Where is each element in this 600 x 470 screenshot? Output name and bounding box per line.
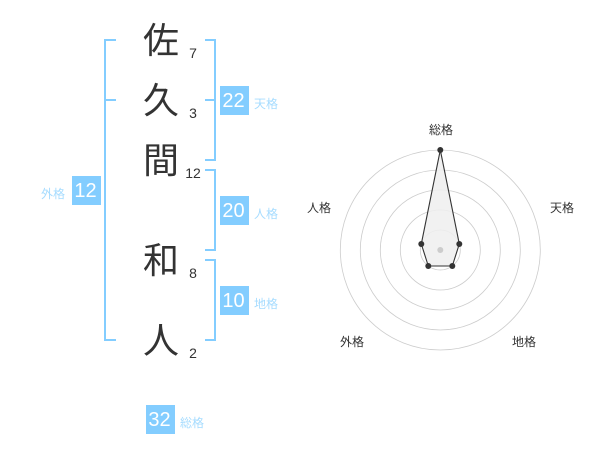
score: 地格 10: 10 (222, 290, 245, 312)
stroke count: 3: 3 (189, 105, 197, 121)
label: 人格: 人格 (254, 207, 278, 221)
label: 地格: 地格 (254, 297, 278, 311)
radar label: 天格: 天格 (550, 201, 574, 215)
label: 外格: 外格 (41, 187, 65, 201)
stroke count: 12: 12 (185, 165, 201, 181)
score: 外格 12 (72, 176, 101, 205)
score: 天格 22 (220, 86, 249, 115)
score: 人格 20 (220, 196, 249, 225)
score: 人格 20: 20 (222, 200, 245, 222)
score: 総格 32: 32 (148, 409, 171, 431)
label: 総格: 総格 (180, 416, 204, 430)
stroke count: 8: 8 (189, 265, 197, 281)
kanji: 人: 人 (143, 320, 179, 361)
kanji: 和: 和 (143, 240, 179, 281)
score: 外格 12: 12 (74, 180, 97, 202)
radar label: 地格: 地格 (512, 335, 536, 349)
stroke count: 7: 7 (189, 45, 197, 61)
radar label: 総格: 総格 (429, 123, 453, 137)
radar label: 外格: 外格 (340, 335, 364, 349)
label: 天格: 天格 (254, 97, 278, 111)
stroke count: 2: 2 (189, 345, 197, 361)
radar label: 人格: 人格 (307, 201, 331, 215)
kanji: 間: 間 (143, 140, 179, 181)
score: 地格 10 (220, 286, 249, 315)
kanji: 佐: 佐 (143, 20, 179, 61)
kanji: 久: 久 (143, 80, 179, 121)
score: 総格 32 (146, 405, 175, 434)
score: 天格 22: 22 (222, 90, 245, 112)
